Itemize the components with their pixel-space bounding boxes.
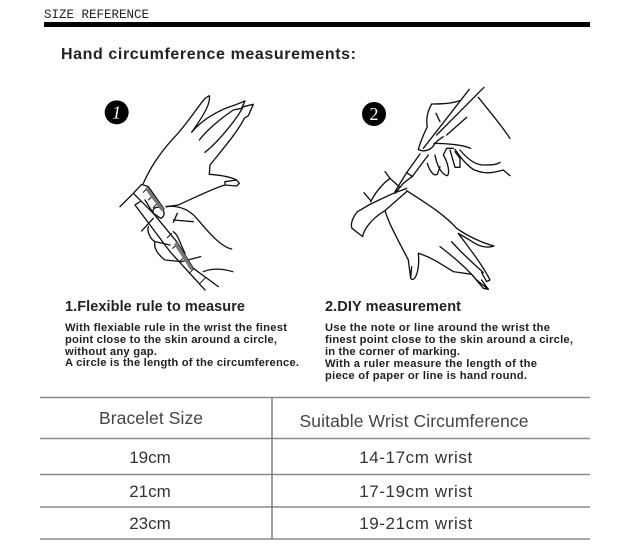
step 1 text block: without any gap. (64, 346, 157, 358)
step 1 heading: 1.Flexible rule to measure (65, 299, 245, 315)
icon: number 2 badge (362, 102, 386, 126)
panel: step 1 illustration (105, 96, 253, 290)
row: 19cm: 14-17cm wrist (359, 448, 473, 467)
row: 21cm: 21cm (129, 482, 171, 501)
step 2 heading: 2.DIY measurement (325, 299, 461, 315)
step 2 text block: With a ruler measure the length of the (325, 358, 537, 370)
step 2 text block: finest point close to the skin around a circle, (325, 334, 573, 346)
table header: bracelet size: Bracelet Size (99, 408, 203, 428)
icon: hand with measuring tape (120, 96, 253, 290)
icon: number 2 badge: 2 (369, 104, 378, 124)
step 2 text block (325, 322, 573, 382)
row: 21cm: 17-19cm wrist (359, 482, 473, 501)
table header: wrist circumference: Suitable Wrist Circumference (300, 411, 528, 431)
icon: number 1 badge (105, 100, 129, 124)
step 2 text block: Use the note or line around the wrist the (325, 322, 550, 334)
row: 23cm (129, 514, 473, 533)
row: 23cm: 23cm (129, 514, 171, 533)
step 1 text block: point close to the skin around a circle, (65, 334, 277, 346)
row: 19cm: 19cm (129, 448, 171, 467)
header bar (44, 22, 590, 27)
step 1 text block: A circle is the length of the circumference. (65, 357, 299, 369)
step 1 text block (64, 322, 299, 369)
main heading: Hand circumference measurements: (61, 46, 356, 63)
header label: SIZE REFERENCE (44, 8, 149, 22)
row: 19cm (129, 448, 473, 467)
step 1 text block: With flexiable rule in the wrist the finest (65, 322, 287, 334)
icon: hand holding pen marking paper strip on wrist (351, 87, 510, 289)
step 2 text block: piece of paper or line is hand round. (325, 370, 527, 382)
size table (40, 397, 590, 539)
panel: step 2 illustration (351, 87, 510, 289)
row: 21cm (129, 482, 473, 501)
step 2 text block: in the corner of marking. (325, 346, 460, 358)
row: 23cm: 19-21cm wrist (359, 514, 473, 533)
icon: number 1 badge: 1 (112, 102, 121, 122)
